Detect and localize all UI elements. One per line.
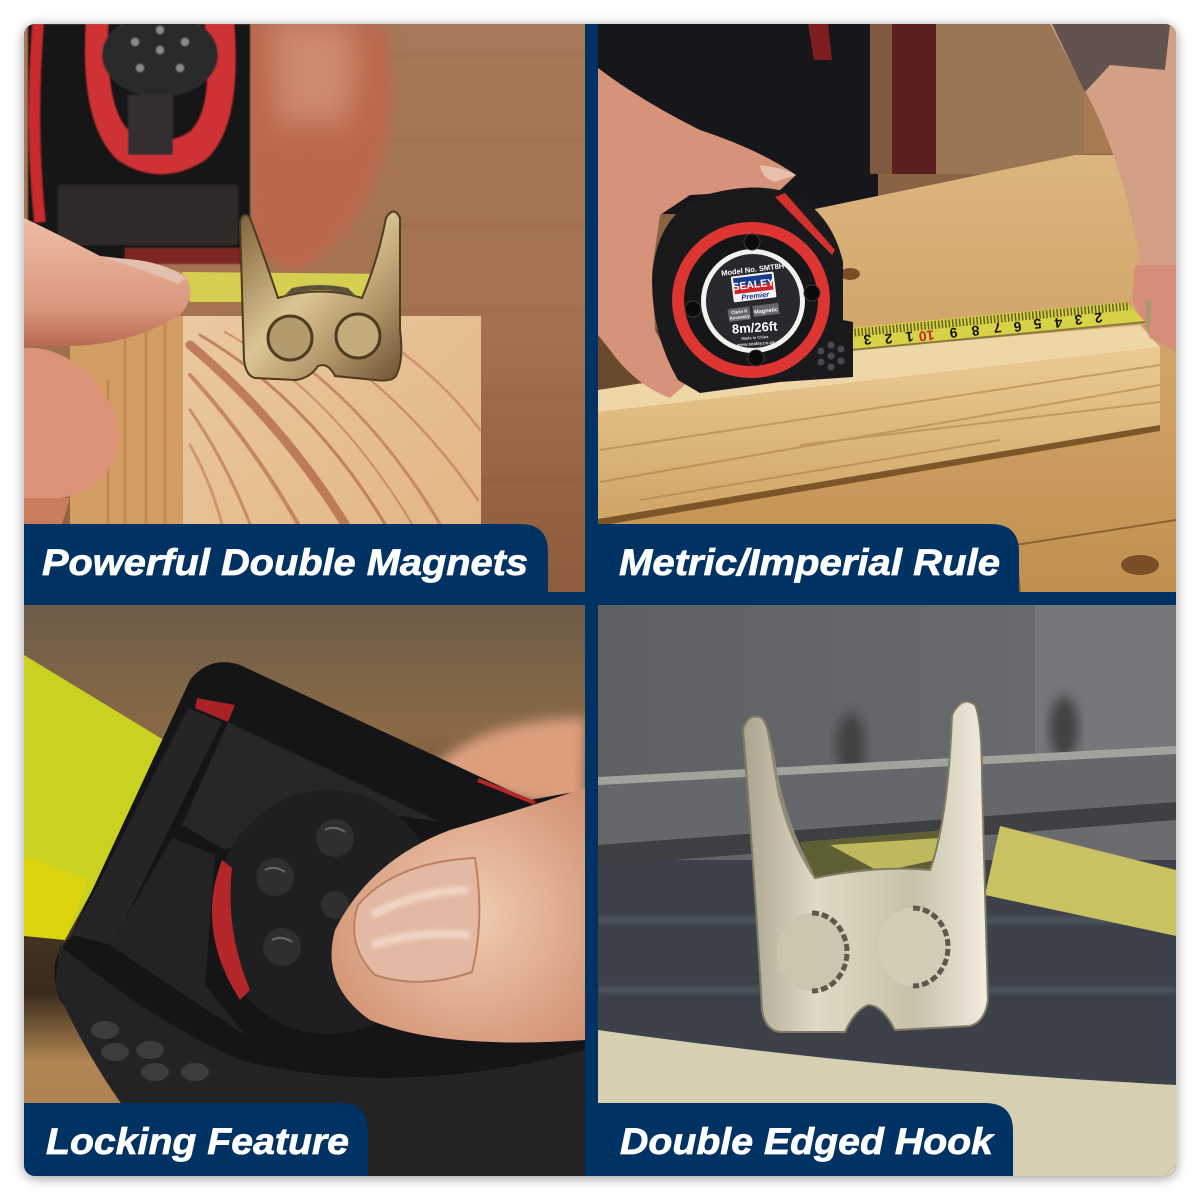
yellow tape blade <box>985 826 1176 936</box>
yellow tape blade with markings: 9 <box>949 325 958 341</box>
icon: lock disc <box>212 805 421 1034</box>
label: metric imperial rule: Metric/Imperial Rule <box>619 542 1000 583</box>
tattooed arm <box>1050 24 1176 352</box>
hand behind tape <box>240 24 392 272</box>
icon: tape measure: Magnetic <box>754 307 778 316</box>
wood grain rings <box>190 330 480 524</box>
metal tape end hook <box>1146 300 1151 332</box>
yellow tape blade with markings: 4 <box>1054 315 1063 331</box>
label: powerful double magnets: Powerful Double Magnets <box>42 542 528 583</box>
label: double edged hook: Double Edged Hook <box>620 1121 996 1162</box>
icon: silver hook with magnets <box>743 702 988 1032</box>
fingers <box>24 218 190 346</box>
panel: powerful double magnets <box>24 13 585 592</box>
yellow tape blade with markings: 2 <box>884 331 893 347</box>
yellow tape blade with markings: 3 <box>863 332 872 348</box>
label: locking feature <box>24 1103 368 1176</box>
icon: tape measure: 8m/26ft <box>731 318 779 337</box>
dark lower band <box>598 860 1176 1090</box>
label: metric imperial rule <box>585 524 1019 592</box>
icon: tape measure: www.sealey.co.uk <box>736 340 776 347</box>
bench seam <box>1015 520 1176 592</box>
yellow tape blade with markings: 7 <box>993 320 1002 336</box>
left hand <box>598 68 796 398</box>
left face grain <box>108 320 165 524</box>
sealey logo: Premier <box>741 290 771 302</box>
icon: tape measure body <box>28 13 250 264</box>
icon: tape measure: Made in China <box>741 334 769 341</box>
panel: locking feature <box>24 605 585 1176</box>
yellow tape blade with markings: 5 <box>1033 316 1042 332</box>
yellow tape blade <box>182 272 370 302</box>
icon: tape measure: Class II <box>731 308 747 315</box>
thumb <box>332 788 585 1042</box>
yellow tape blade with markings: 8 <box>971 323 980 339</box>
black tape casing <box>54 662 585 1078</box>
sealey logo <box>731 271 777 303</box>
yellow tape blade with markings: 1 <box>905 329 914 345</box>
label: locking feature: Locking Feature <box>46 1121 349 1162</box>
label: powerful double magnets <box>24 524 548 592</box>
horizontal rail <box>838 754 1176 781</box>
yellow tape blade with markings: 6 <box>1013 319 1022 335</box>
icon: tape measure: Accuracy <box>729 313 751 321</box>
yellow tape blade with markings <box>851 302 1145 350</box>
panel: metric imperial rule <box>598 24 1176 592</box>
icon: gold hook with magnets <box>240 212 401 380</box>
icon: tape measure: Model No. SMT8H <box>721 261 785 278</box>
sealey logo: SEALEY <box>732 276 775 293</box>
yellow tape blade <box>24 655 172 940</box>
timber block <box>598 325 1160 526</box>
label: double edged hook <box>585 1103 1013 1176</box>
panel: double edged hook <box>598 605 1176 1176</box>
icon: tape measure <box>652 188 853 393</box>
yellow tape blade with markings: 10 <box>918 327 935 345</box>
workbench <box>598 155 1176 592</box>
yellow tape blade with markings: 2 <box>1094 310 1103 326</box>
grip dots <box>91 1021 209 1081</box>
wood block <box>70 316 183 524</box>
yellow tape blade with markings: 3 <box>1074 312 1083 328</box>
